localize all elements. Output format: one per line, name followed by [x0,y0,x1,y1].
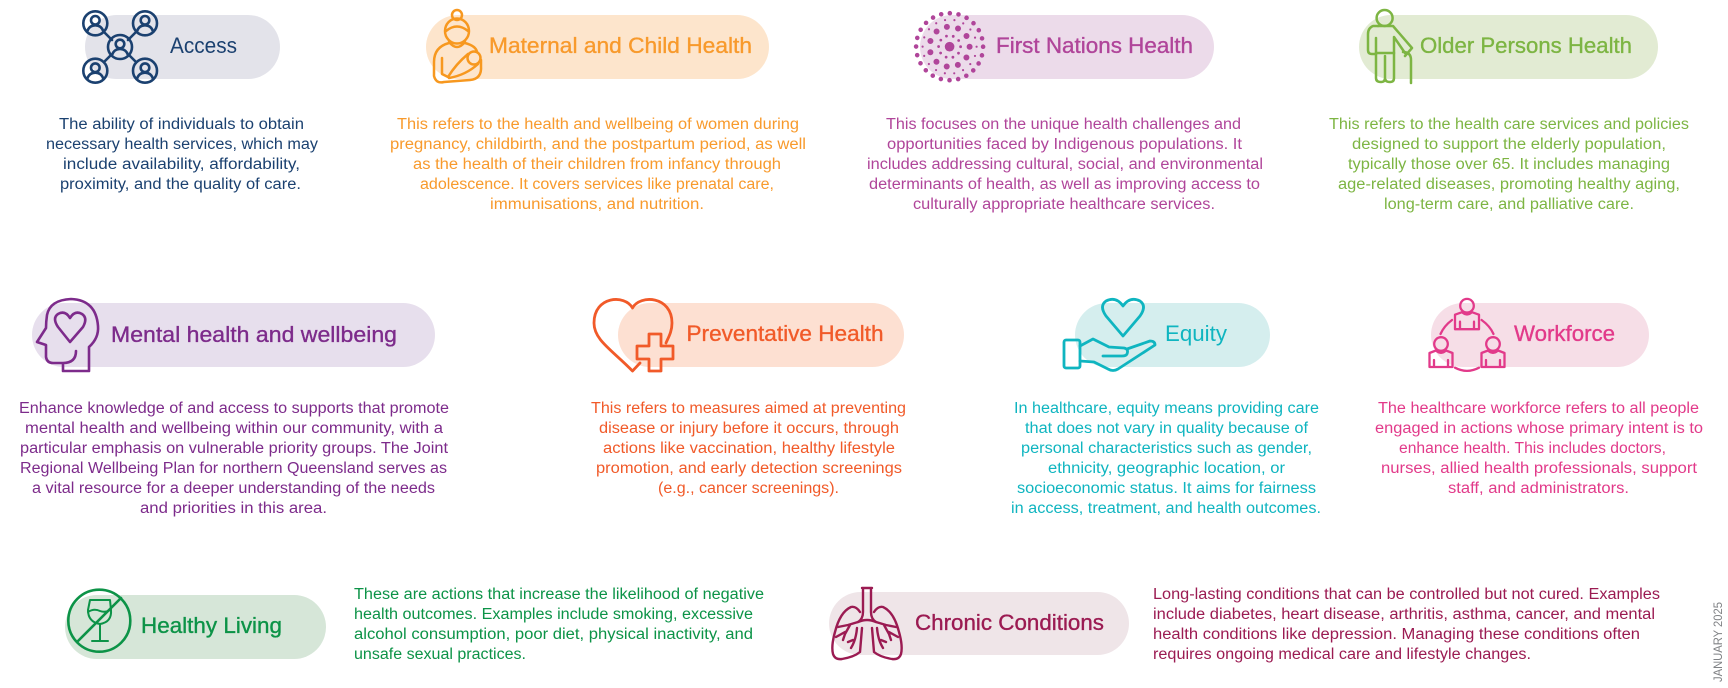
pill: Healthy Living [65,595,326,659]
text: Mental health description: Enhance knowledge of and access to supports that promote [19,400,449,417]
text: Preventative description: This refers to measures aimed at preventing [591,400,906,417]
text: Older Persons description: designed to support the elderly population, [1352,136,1666,153]
text: Mental health description: Regional Wellbeing Plan for northern Queensland serves as [20,460,447,477]
pill: Workforce [1431,303,1649,367]
icon: lungs [832,588,902,659]
heading: First Nations Health: First Nations Health [996,33,1193,58]
text: Equity description: In healthcare, equity means providing care [1014,400,1319,417]
text: Preventative description: promotion, and early detection screenings [596,460,902,477]
text: Maternal description: This refers to the health and wellbeing of women during [397,116,799,133]
text: Healthy Living description: These are actions that increase the likelihood of negative [354,586,764,603]
panel: Chronic Conditions [829,586,1660,663]
text: Preventative description: disease or injury before it occurs, through [599,420,899,437]
icon: older person with cane [1368,10,1412,83]
text: Healthy Living description: health outcomes. Examples include smoking, excessive [354,606,753,623]
panel: Older Persons Health [1329,10,1689,213]
pill: Mental health and wellbeing [32,303,435,367]
icon: three connected workers [1430,299,1504,371]
icon: connected people [83,11,157,83]
text: Preventative description [591,400,906,497]
text: Workforce description: nurses, allied health professionals, support [1381,460,1698,477]
text: First Nations description: culturally appropriate healthcare services. [913,196,1215,213]
pill: Access [85,15,280,79]
pill: Older Persons Health [1359,15,1658,79]
text: Older Persons description [1329,116,1689,213]
text: Healthy Living description: alcohol consumption, poor diet, physical inactivity, and [354,626,753,643]
text: Older Persons description: long-term care, and palliative care. [1384,196,1634,213]
heading: Access: Access [170,33,237,58]
text: Maternal description: as the health of their children from infancy through [413,156,781,173]
panel: Workforce [1375,299,1703,497]
text: Healthy Living description [354,586,764,663]
icon: mother and baby [434,10,481,82]
text: Older Persons description: typically those over 65. It includes managing [1348,156,1670,173]
icon: dot painting circle [916,13,983,80]
icon: heart with cross [594,299,673,371]
text: Workforce description: The healthcare workforce refers to all people [1378,400,1699,417]
text: Maternal description [390,116,806,213]
text: Mental health description: mental health and wellbeing within our community, with a [25,420,443,437]
text: Access description: necessary health services, which may [46,136,318,153]
heading: Mental health and wellbeing: Mental health and wellbeing [111,322,397,347]
pill: Chronic Conditions [829,592,1129,655]
text: First Nations description: includes addressing cultural, social, and environmental [867,156,1263,173]
text: First Nations description: This focuses on the unique health challenges and [886,116,1241,133]
text: Equity description: socioeconomic status. It aims for fairness [1017,480,1316,497]
text: Access description: include availability, affordability, [63,156,300,173]
text: Workforce description: engaged in actions whose primary intent is to [1375,420,1703,437]
text: Maternal description: adolescence. It covers services like prenatal care, [420,176,774,193]
icon: hand holding heart [1064,299,1155,370]
text: Chronic Conditions description: health conditions like depression. Managing these conditions often [1153,626,1640,643]
heading: Chronic Conditions: Chronic Conditions [915,610,1104,635]
text: Older Persons description: This refers to the health care services and policies [1329,116,1689,133]
panel: Equity [1011,299,1321,517]
text: Workforce description: enhance health. This includes doctors, [1399,440,1666,457]
text: Equity description [1011,400,1321,517]
text: Chronic Conditions description: Long-lasting conditions that can be controlled but not cured. Examples [1153,586,1660,603]
text: Preventative description: actions like vaccination, healthy lifestyle [603,440,895,457]
panel: Access [46,11,318,193]
heading: Maternal and Child Health: Maternal and Child Health [489,33,752,58]
text: First Nations description: determinants of health, as well as improving access to [869,176,1260,193]
text: Workforce description [1375,400,1703,497]
text: Equity description: in access, treatment, and health outcomes. [1011,500,1321,517]
heading: Healthy Living: Healthy Living [141,613,282,638]
pill: Preventative Health [618,303,904,367]
text: Access description: proximity, and the quality of care. [60,176,301,193]
text: Maternal description: immunisations, and nutrition. [490,196,704,213]
icon: head with heart [37,299,98,371]
panel: Mental health and wellbeing [19,299,449,517]
icon: crossed out wine glass [68,590,130,652]
text: Chronic Conditions description: include diabetes, heart disease, arthritis, asthma, cancer, and mental [1153,606,1655,623]
text: First Nations description [867,116,1263,213]
heading: Older Persons Health: Older Persons Health [1420,33,1632,58]
text: Equity description: personal characteristics such as gender, [1021,440,1312,457]
text: Chronic Conditions description: requires ongoing medical care and lifestyle changes. [1153,646,1531,663]
text: Access description: The ability of individuals to obtain [59,116,304,133]
text: Older Persons description: age-related diseases, promoting healthy aging, [1338,176,1680,193]
heading: Equity: Equity [1165,321,1227,346]
text: Mental health description: and priorities in this area. [140,500,327,517]
text: Equity description: that does not vary in quality because of [1025,420,1309,437]
text: Access description [46,116,318,193]
pill: Equity [1075,303,1270,367]
panel: Healthy Living [65,586,764,663]
text: Equity description: ethnicity, geographic location, or [1048,460,1285,477]
text: Mental health description [19,400,449,517]
heading: Workforce: Workforce [1514,321,1615,346]
text: Chronic Conditions description [1153,586,1660,663]
panel: First Nations Health [867,13,1263,213]
panel: Preventative Health [591,299,906,497]
text: Healthy Living description: unsafe sexual practices. [354,646,526,663]
panel: Maternal and Child Health [390,10,806,213]
date stamp: JANUARY 2025 [1711,602,1725,682]
text: Maternal description: pregnancy, childbirth, and the postpartum period, as well [390,136,806,153]
text: Mental health description: particular emphasis on vulnerable priority groups. The Joint [20,440,449,457]
text: Workforce description: staff, and administrators. [1448,480,1629,497]
text: First Nations description: opportunities faced by Indigenous populations. It [887,136,1243,153]
pill: First Nations Health [920,15,1214,79]
text: Mental health description: a vital resource for a deeper understanding of the needs [32,480,435,497]
pill: Maternal and Child Health [426,15,769,79]
text: Preventative description: (e.g., cancer screenings). [658,480,839,497]
heading: Preventative Health: Preventative Health [686,321,884,346]
